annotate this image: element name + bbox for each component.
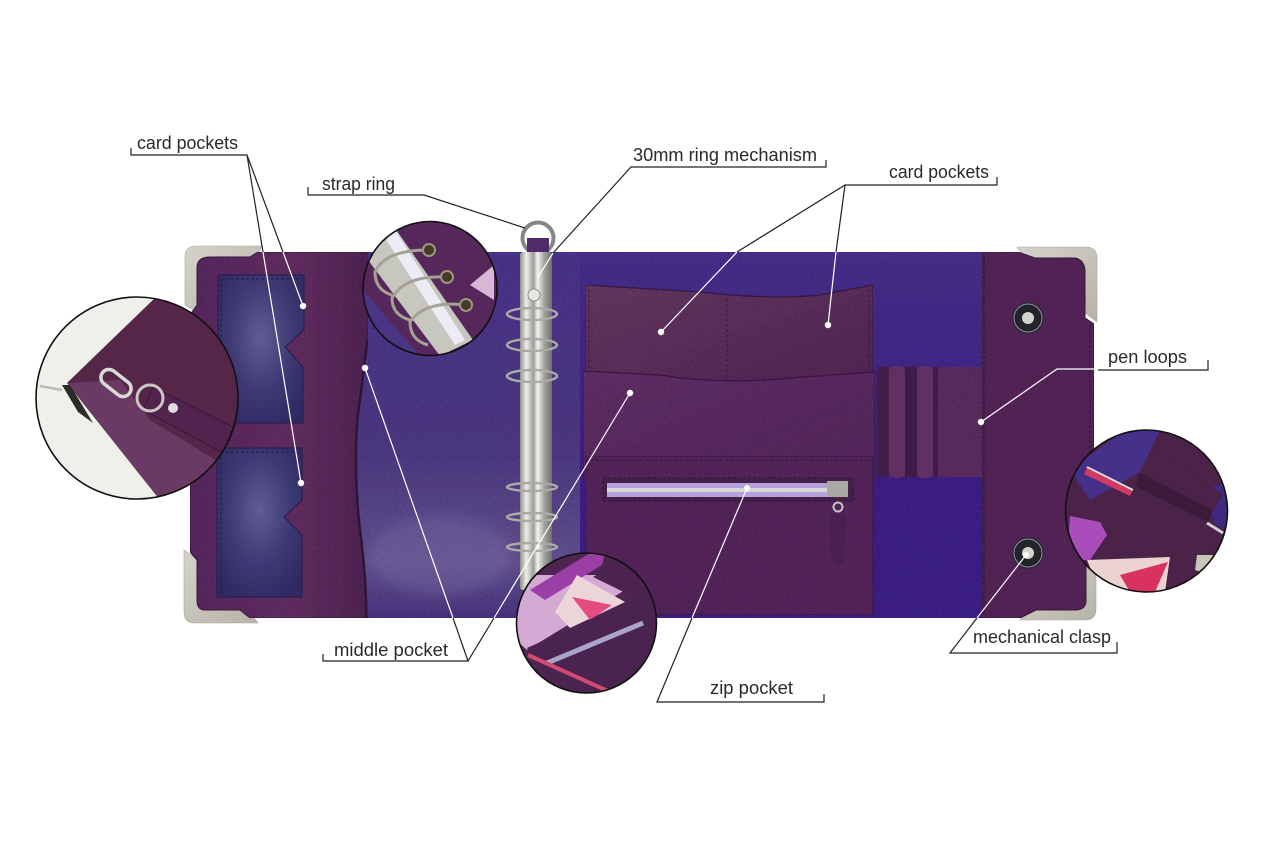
card pocket: upper (218, 275, 304, 423)
label: pen loops: pen loops (1108, 347, 1187, 367)
metal corners (184, 246, 1097, 623)
inset: rings close-up (363, 221, 497, 356)
pocket: upper card pockets (585, 285, 873, 392)
label: 30mm ring mechanism (538, 145, 826, 277)
left flap dark edge (356, 340, 367, 618)
inset: clip and strap (36, 296, 240, 500)
zip tape (607, 483, 848, 497)
zip teeth (607, 488, 839, 492)
mechanical clasp: top snap (1012, 302, 1044, 334)
ring mechanism plate (520, 252, 552, 590)
lining: bottom highlight (370, 515, 510, 595)
lining: left inner (345, 252, 585, 618)
zip puller (827, 481, 848, 568)
label: card pockets left: card pockets (137, 133, 238, 153)
inset: pen in loop (1066, 430, 1230, 592)
pocket: zip pocket (585, 456, 873, 615)
label: zip pocket (657, 485, 824, 702)
inset: zip pocket close-up (516, 553, 660, 693)
label: card pockets right (658, 162, 997, 335)
panel: right flap (982, 252, 1094, 618)
right flap stitching (984, 256, 1090, 616)
lining: right inner (580, 252, 982, 618)
strap ring (522, 222, 554, 254)
zip frame (603, 478, 853, 501)
label: zip pocket: zip pocket (710, 678, 793, 698)
label: middle pocket (323, 365, 633, 661)
zip pocket stitching (585, 459, 872, 461)
flap stitching (221, 279, 301, 594)
mechanical clasp: bottom snap (1012, 538, 1044, 568)
label: mechanical clasp: mechanical clasp (973, 627, 1111, 647)
pocket divider stitching (589, 290, 869, 385)
organizer body (190, 222, 1094, 618)
label: strap ring (308, 174, 525, 228)
card pocket: lower (217, 448, 302, 597)
label: middle pocket: middle pocket (334, 640, 448, 660)
pocket: middle pocket (583, 371, 875, 480)
label: 30mm ring mechanism: 30mm ring mechanism (633, 145, 817, 165)
label: card pockets right: card pockets (889, 162, 989, 182)
annotated organizer diagram (35, 136, 1228, 703)
rings (507, 308, 557, 551)
panel: left flap (190, 252, 368, 618)
label: strap ring: strap ring (322, 174, 395, 194)
rivet (528, 289, 540, 301)
pen loops (877, 366, 982, 478)
label: pen loops (978, 347, 1208, 425)
label: card pockets left (131, 133, 306, 486)
label: mechanical clasp (950, 552, 1117, 653)
